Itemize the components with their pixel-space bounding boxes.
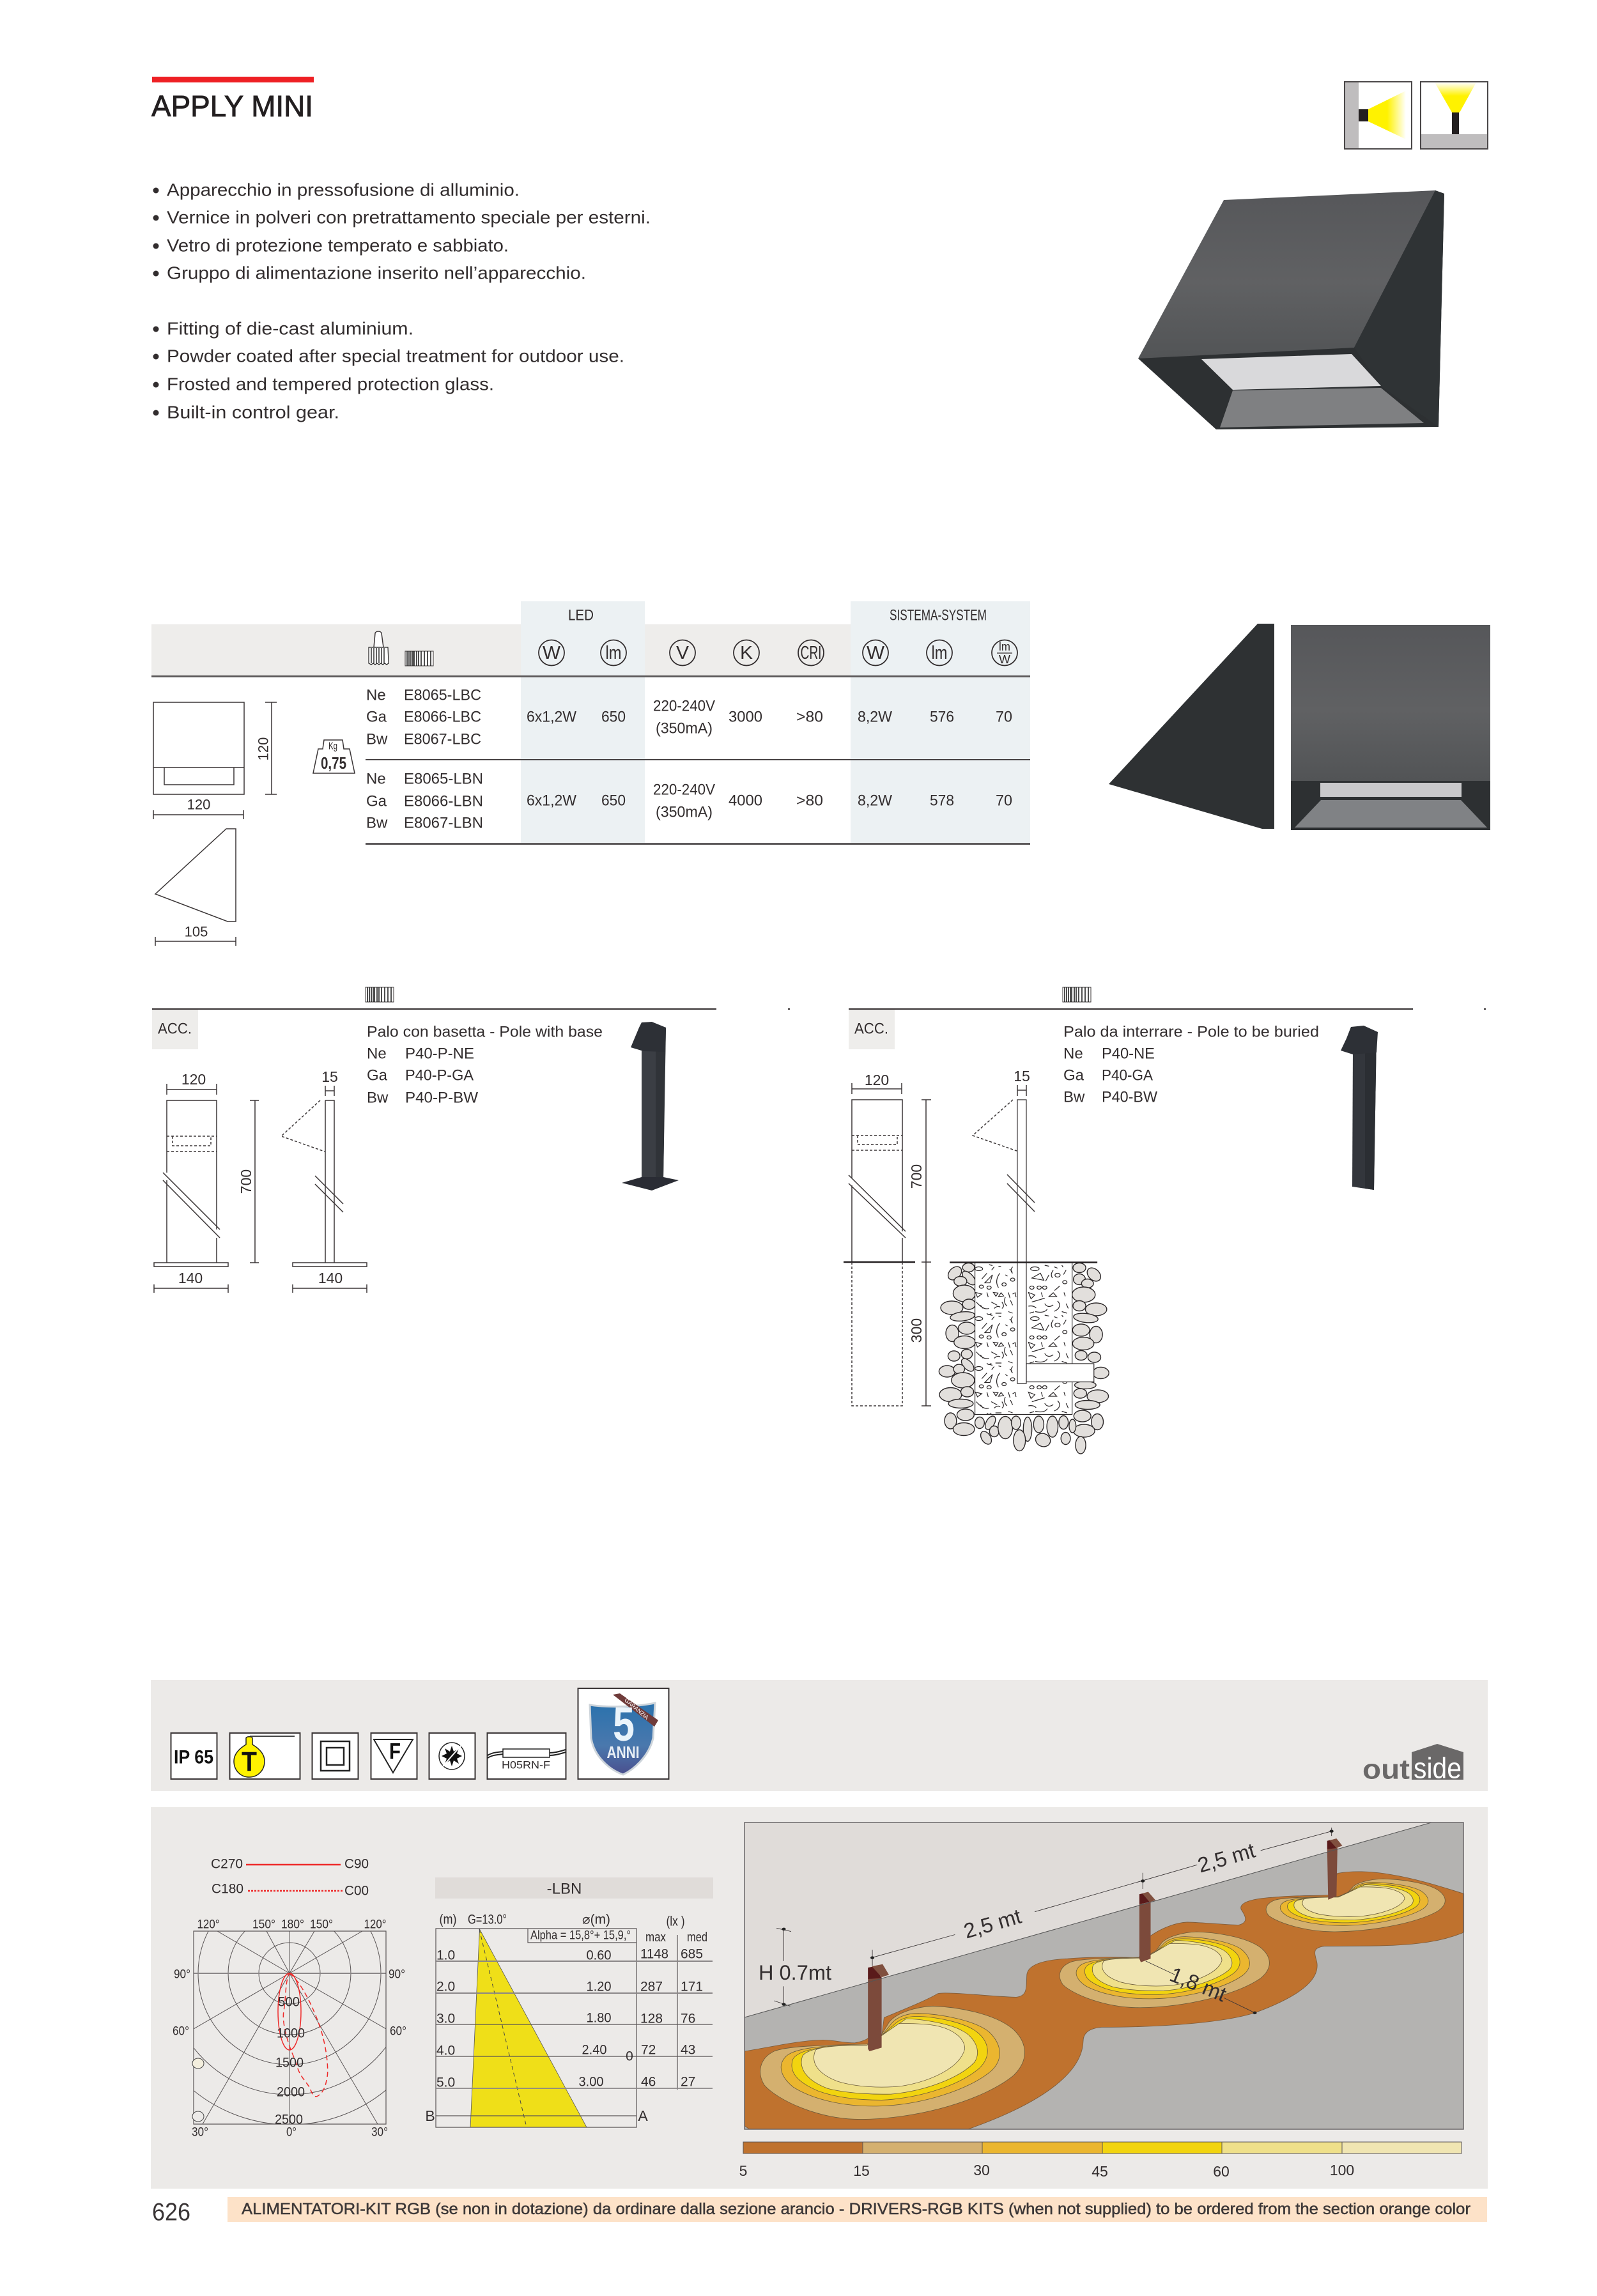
pole front drawing: 700 bbox=[238, 1169, 254, 1194]
polar diagram: 2500 bbox=[275, 2113, 303, 2127]
panel: pole with base bbox=[152, 987, 790, 1293]
dimension drawing: front view: 120 bbox=[256, 737, 271, 760]
ACC label bbox=[152, 1010, 198, 1049]
icon: IP 65 bbox=[171, 1733, 217, 1779]
footer note bbox=[228, 2197, 1487, 2222]
beam cone table: 46 bbox=[641, 2074, 656, 2090]
logo: outside bbox=[1362, 1744, 1463, 1785]
panel: pole to be buried bbox=[844, 987, 1486, 1454]
polar diagram legend: C00 bbox=[344, 1884, 369, 1898]
icon: class II double square bbox=[312, 1733, 358, 1779]
beam cone table: Alpha = 15,8°+ 15,9,° bbox=[530, 1929, 631, 1943]
polar diagram: 30° bbox=[192, 2125, 208, 2139]
icon: laser no glare bbox=[429, 1733, 475, 1779]
pole description: P40-P-GA bbox=[405, 1067, 474, 1084]
table column icons bbox=[539, 640, 1017, 666]
table codes row LBC: Ne bbox=[366, 686, 386, 704]
table column icons: lm bbox=[606, 643, 621, 663]
beam cone table: 2.0 bbox=[436, 1980, 455, 1994]
beam table heading -LBN: -LBN bbox=[547, 1880, 582, 1898]
pole 1 bbox=[868, 1964, 889, 2051]
pole 2 bbox=[1139, 1892, 1155, 1962]
icon: 5 year warranty shield: GARANZIA bbox=[623, 1697, 650, 1721]
polar diagram: 150° bbox=[310, 1918, 333, 1931]
table values row 4000K bbox=[527, 781, 1012, 821]
beam cone table: 27 bbox=[681, 2074, 695, 2090]
polar diagram legend: C270 bbox=[211, 1857, 243, 1871]
beam cone table: 1.0 bbox=[436, 1948, 455, 1963]
table codes row LBC: Ga bbox=[366, 708, 387, 726]
beam cone table: 287 bbox=[640, 1980, 663, 1994]
polar diagram: 500 bbox=[278, 1995, 300, 2009]
table codes row LBC: E8067-LBC bbox=[404, 731, 481, 748]
icon: barcode bbox=[405, 651, 433, 666]
beam cone table: 2.40 bbox=[582, 2042, 607, 2058]
table column icons: W bbox=[867, 643, 885, 663]
icon: T bulb bbox=[230, 1733, 300, 1779]
colour scale legend: 45 bbox=[1092, 2163, 1108, 2180]
beam cone table: 171 bbox=[681, 1980, 703, 1994]
icon: 5 year warranty shield bbox=[578, 1688, 668, 1779]
beam cone table: 0 bbox=[626, 2049, 633, 2064]
table column icons: W bbox=[543, 643, 561, 663]
product photo: front view bbox=[1291, 625, 1490, 830]
pole 3 bbox=[1327, 1838, 1343, 1900]
table values row 4000K: 8,2W bbox=[858, 792, 892, 809]
polar diagram legend: C180 bbox=[212, 1881, 243, 1897]
text block: features in English: Powder coated after special treatment for outdoor use. bbox=[167, 346, 624, 366]
pole description: Ga bbox=[367, 1067, 388, 1084]
beam cone table: 76 bbox=[681, 2012, 695, 2026]
table codes row LBC: Bw bbox=[366, 731, 388, 748]
label radius 1,8 mt: 1,8 mt bbox=[1167, 1962, 1230, 2006]
beam cone table: 43 bbox=[681, 2042, 695, 2058]
polar diagram: 30° bbox=[371, 2125, 388, 2139]
foundation drawing with stones and concrete: 15 bbox=[1014, 1068, 1030, 1084]
icon: bollard light bbox=[1421, 82, 1488, 149]
colour scale legend: 5 bbox=[739, 2162, 747, 2179]
beam cone table bbox=[425, 1912, 713, 2127]
logo: outside: side bbox=[1414, 1752, 1462, 1784]
buried pole front drawing: 120 bbox=[865, 1072, 889, 1088]
polar diagram: 120° bbox=[364, 1918, 386, 1931]
table column icons: V bbox=[676, 643, 690, 663]
product photo: side view bbox=[1109, 624, 1274, 829]
table group headings bbox=[568, 607, 987, 624]
pole description: P40-BW bbox=[1102, 1089, 1157, 1106]
polar diagram: 90° bbox=[389, 1968, 405, 1981]
table values row 3000K: >80 bbox=[796, 708, 823, 726]
polar diagram: 60° bbox=[173, 2024, 189, 2038]
table group headings: SISTEMA-SYSTEM bbox=[890, 607, 987, 624]
pole description: Palo con basetta - Pole with base bbox=[367, 1024, 603, 1040]
table codes row LBN: Bw bbox=[366, 814, 388, 832]
buried pole front drawing bbox=[844, 1072, 931, 1406]
beam cone table: 72 bbox=[641, 2042, 656, 2058]
icon: F mark bbox=[371, 1733, 417, 1779]
table codes row LBC: E8066-LBC bbox=[404, 708, 481, 726]
dimension drawing: front view bbox=[153, 702, 277, 819]
beam cone table: B bbox=[425, 2107, 435, 2124]
icon: weight 0,75 kg: Kg bbox=[328, 741, 337, 751]
beam cone table: 3.00 bbox=[579, 2074, 603, 2090]
table values row 4000K: 220-240V bbox=[653, 781, 715, 799]
table values row 4000K: 650 bbox=[601, 792, 626, 809]
pole description: Palo da interrare - Pole to be buried bbox=[1063, 1024, 1319, 1040]
beam cone table: (lx ) bbox=[666, 1915, 685, 1929]
polar diagram: 180° bbox=[281, 1918, 304, 1931]
pole description: P40-P-BW bbox=[405, 1089, 478, 1107]
text block: features in Italian bbox=[153, 180, 651, 282]
polar diagram: 150° bbox=[252, 1918, 275, 1931]
label H 0.7mt: H 0.7mt bbox=[759, 1961, 831, 1984]
beam cone table: 1148 bbox=[640, 1946, 668, 1962]
beam cone table: 128 bbox=[640, 2012, 663, 2026]
polar diagram: 0° bbox=[286, 2125, 297, 2139]
text block: features in Italian: Vetro di protezione temperato e sabbiato. bbox=[167, 235, 509, 256]
pole description: Ne bbox=[1063, 1045, 1083, 1062]
colour scale legend: 100 bbox=[1330, 2162, 1354, 2178]
icon: cable H05RN-F bbox=[487, 1733, 566, 1779]
ACC label: ACC. bbox=[854, 1020, 888, 1038]
ACC label: ACC. bbox=[158, 1020, 192, 1038]
colour scale legend: 15 bbox=[853, 2162, 870, 2179]
dimension drawing: side view: 105 bbox=[185, 924, 208, 939]
beam cone table: 5.0 bbox=[436, 2076, 455, 2090]
label spacing 2,5 mt: 2,5 mt bbox=[1195, 1838, 1258, 1877]
table codes row LBN bbox=[366, 771, 483, 832]
pole description bbox=[367, 1024, 603, 1107]
polar diagram: 90° bbox=[174, 1968, 190, 1981]
table values row 3000K: 220-240V bbox=[653, 698, 715, 714]
logo: outside: out bbox=[1362, 1753, 1410, 1785]
table values row 4000K: 6x1,2W bbox=[527, 792, 576, 809]
pole description: Bw bbox=[1063, 1089, 1085, 1106]
pole side drawing: 15 bbox=[321, 1068, 338, 1085]
polar diagram legend bbox=[211, 1857, 369, 1898]
pole description bbox=[1063, 1024, 1319, 1106]
text block: features in Italian: Vernice in polveri con pretrattamento speciale per esterni. bbox=[167, 207, 651, 227]
colour scale legend: 60 bbox=[1213, 2163, 1230, 2180]
icon: weight 0,75 kg: 0,75 bbox=[321, 753, 346, 773]
beam cone table: 4.0 bbox=[436, 2044, 455, 2058]
pole front drawing: 140 bbox=[178, 1270, 203, 1286]
pole description: P40-P-NE bbox=[405, 1045, 474, 1062]
pole side drawing bbox=[281, 1068, 367, 1293]
footer note: ALIMENTATORI-KIT RGB (se non in dotazione) da ordinare dalla sezione arancio - DRIVERS-RGB KITS (when not supplied) to be ordered from the section orange color bbox=[242, 2200, 1470, 2218]
pole front drawing bbox=[154, 1071, 259, 1293]
beam cone table: ⌀(m) bbox=[582, 1912, 610, 1927]
table group headings: LED bbox=[568, 607, 594, 624]
beam cone table: A bbox=[638, 2107, 648, 2124]
beam cone table: max bbox=[645, 1930, 666, 1945]
text block: features in Italian: Gruppo di alimentazione inserito nell’apparecchio. bbox=[167, 263, 586, 282]
red accent bar bbox=[152, 77, 314, 82]
polar diagram: 1000 bbox=[277, 2026, 305, 2041]
pole description: P40-NE bbox=[1102, 1045, 1155, 1062]
product photo: wall lamp three-quarter view bbox=[1138, 190, 1444, 429]
beam cone table: 3.0 bbox=[436, 2012, 455, 2026]
table values row 3000K: 576 bbox=[930, 708, 954, 726]
foundation drawing with stones and concrete bbox=[939, 1068, 1109, 1454]
table codes row LBN: Ne bbox=[366, 771, 386, 787]
pole side drawing: 140 bbox=[318, 1270, 343, 1286]
table values row 3000K: 70 bbox=[996, 708, 1012, 726]
text block: features in English bbox=[153, 318, 624, 422]
beam cone table: G=13.0° bbox=[468, 1912, 507, 1927]
title block bbox=[151, 77, 314, 123]
table values row 4000K: 578 bbox=[930, 792, 954, 809]
table values row 3000K: 650 bbox=[601, 708, 626, 726]
pole description: Bw bbox=[367, 1089, 389, 1107]
table codes row LBN: Ga bbox=[366, 792, 387, 810]
table values row 3000K bbox=[527, 698, 1012, 737]
table header backgrounds bbox=[151, 601, 1030, 845]
table column icons: K bbox=[740, 643, 753, 663]
table codes row LBN: E8067-LBN bbox=[404, 814, 483, 832]
polar diagram legend: C90 bbox=[344, 1857, 369, 1871]
product photo: pole with base bbox=[622, 1022, 679, 1190]
icon: lamp finish brush bbox=[369, 631, 389, 665]
polar diagram: 2000 bbox=[277, 2084, 305, 2100]
icon: weight 0,75 kg bbox=[313, 740, 355, 773]
icon: 5 year warranty shield: 5 bbox=[613, 1697, 635, 1751]
table values row 3000K: 3000 bbox=[729, 708, 762, 726]
table codes row LBC: E8065-LBC bbox=[404, 686, 481, 704]
pole description: Ga bbox=[1063, 1067, 1084, 1084]
panel: photometric data bbox=[151, 1807, 1488, 2189]
heading: APPLY MINI bbox=[151, 89, 313, 123]
table values row 4000K: (350mA) bbox=[656, 804, 713, 821]
polar diagram: 1500 bbox=[275, 2055, 304, 2070]
polar diagram: 60° bbox=[390, 2024, 406, 2038]
beam cone table: 685 bbox=[681, 1946, 703, 1962]
table column icons: lm bbox=[999, 640, 1010, 653]
table column icons: W bbox=[999, 653, 1010, 666]
beam table heading -LBN bbox=[435, 1877, 713, 1899]
dimension drawing: front view: 120 bbox=[187, 796, 210, 813]
pole front drawing: 120 bbox=[181, 1071, 206, 1088]
icon: IP 65: IP 65 bbox=[174, 1747, 213, 1768]
polar diagram: 120° bbox=[197, 1918, 220, 1931]
table values row 4000K: 4000 bbox=[729, 792, 762, 809]
barcode icon bbox=[366, 987, 394, 1002]
table values row 3000K: 6x1,2W bbox=[527, 708, 576, 726]
icon: wall light bbox=[1345, 82, 1412, 149]
table values row 3000K: (350mA) bbox=[656, 720, 713, 737]
icon: F mark: F bbox=[389, 1739, 401, 1764]
isolux ground diagram bbox=[744, 1822, 1464, 2129]
buried pole front drawing: 700 bbox=[908, 1164, 925, 1189]
text block: features in Italian: Apparecchio in pressofusione di alluminio. bbox=[167, 180, 520, 199]
beam cone table: 1.20 bbox=[587, 1980, 611, 1994]
label spacing 2,5 mt: 2,5 mt bbox=[961, 1904, 1024, 1943]
icon: cable H05RN-F: H05RN-F bbox=[502, 1759, 550, 1771]
text block: features in English: Built-in control gear. bbox=[167, 403, 339, 422]
table values row 4000K: >80 bbox=[796, 792, 823, 809]
table codes row LBN: E8065-LBN bbox=[404, 771, 483, 787]
polar diagram bbox=[173, 1920, 406, 2136]
beam cone table: med bbox=[687, 1930, 707, 1945]
table codes row LBC bbox=[366, 686, 481, 748]
beam cone table: 1.80 bbox=[587, 2010, 611, 2026]
colour scale legend bbox=[739, 2142, 1462, 2180]
page number: 626 bbox=[152, 2198, 190, 2226]
table column icons: lm bbox=[932, 643, 947, 663]
ACC label bbox=[849, 1010, 895, 1049]
product photo: pole to be buried bbox=[1341, 1026, 1378, 1190]
dimension drawing: side view bbox=[155, 829, 236, 946]
icon: 5 year warranty shield: ANNI bbox=[607, 1743, 639, 1762]
text block: features in English: Fitting of die-cast aluminium. bbox=[167, 318, 413, 339]
table values row 4000K: 70 bbox=[996, 792, 1012, 809]
panel: certifications bar bbox=[151, 1680, 1488, 1791]
table values row 3000K: 8,2W bbox=[858, 708, 892, 726]
beam cone table: 0.60 bbox=[587, 1948, 611, 1963]
buried pole front drawing: 300 bbox=[908, 1318, 925, 1343]
table codes row LBN: E8066-LBN bbox=[404, 792, 483, 810]
text block: features in English: Frosted and tempered protection glass. bbox=[167, 374, 494, 394]
pole description: P40-GA bbox=[1102, 1067, 1153, 1084]
colour scale legend: 30 bbox=[973, 2162, 990, 2178]
beam cone table: (m) bbox=[440, 1912, 456, 1927]
icon: T bulb: T bbox=[242, 1746, 257, 1777]
table column icons: CRI bbox=[800, 643, 822, 663]
pole description: Ne bbox=[367, 1045, 387, 1062]
barcode icon bbox=[1063, 987, 1091, 1002]
